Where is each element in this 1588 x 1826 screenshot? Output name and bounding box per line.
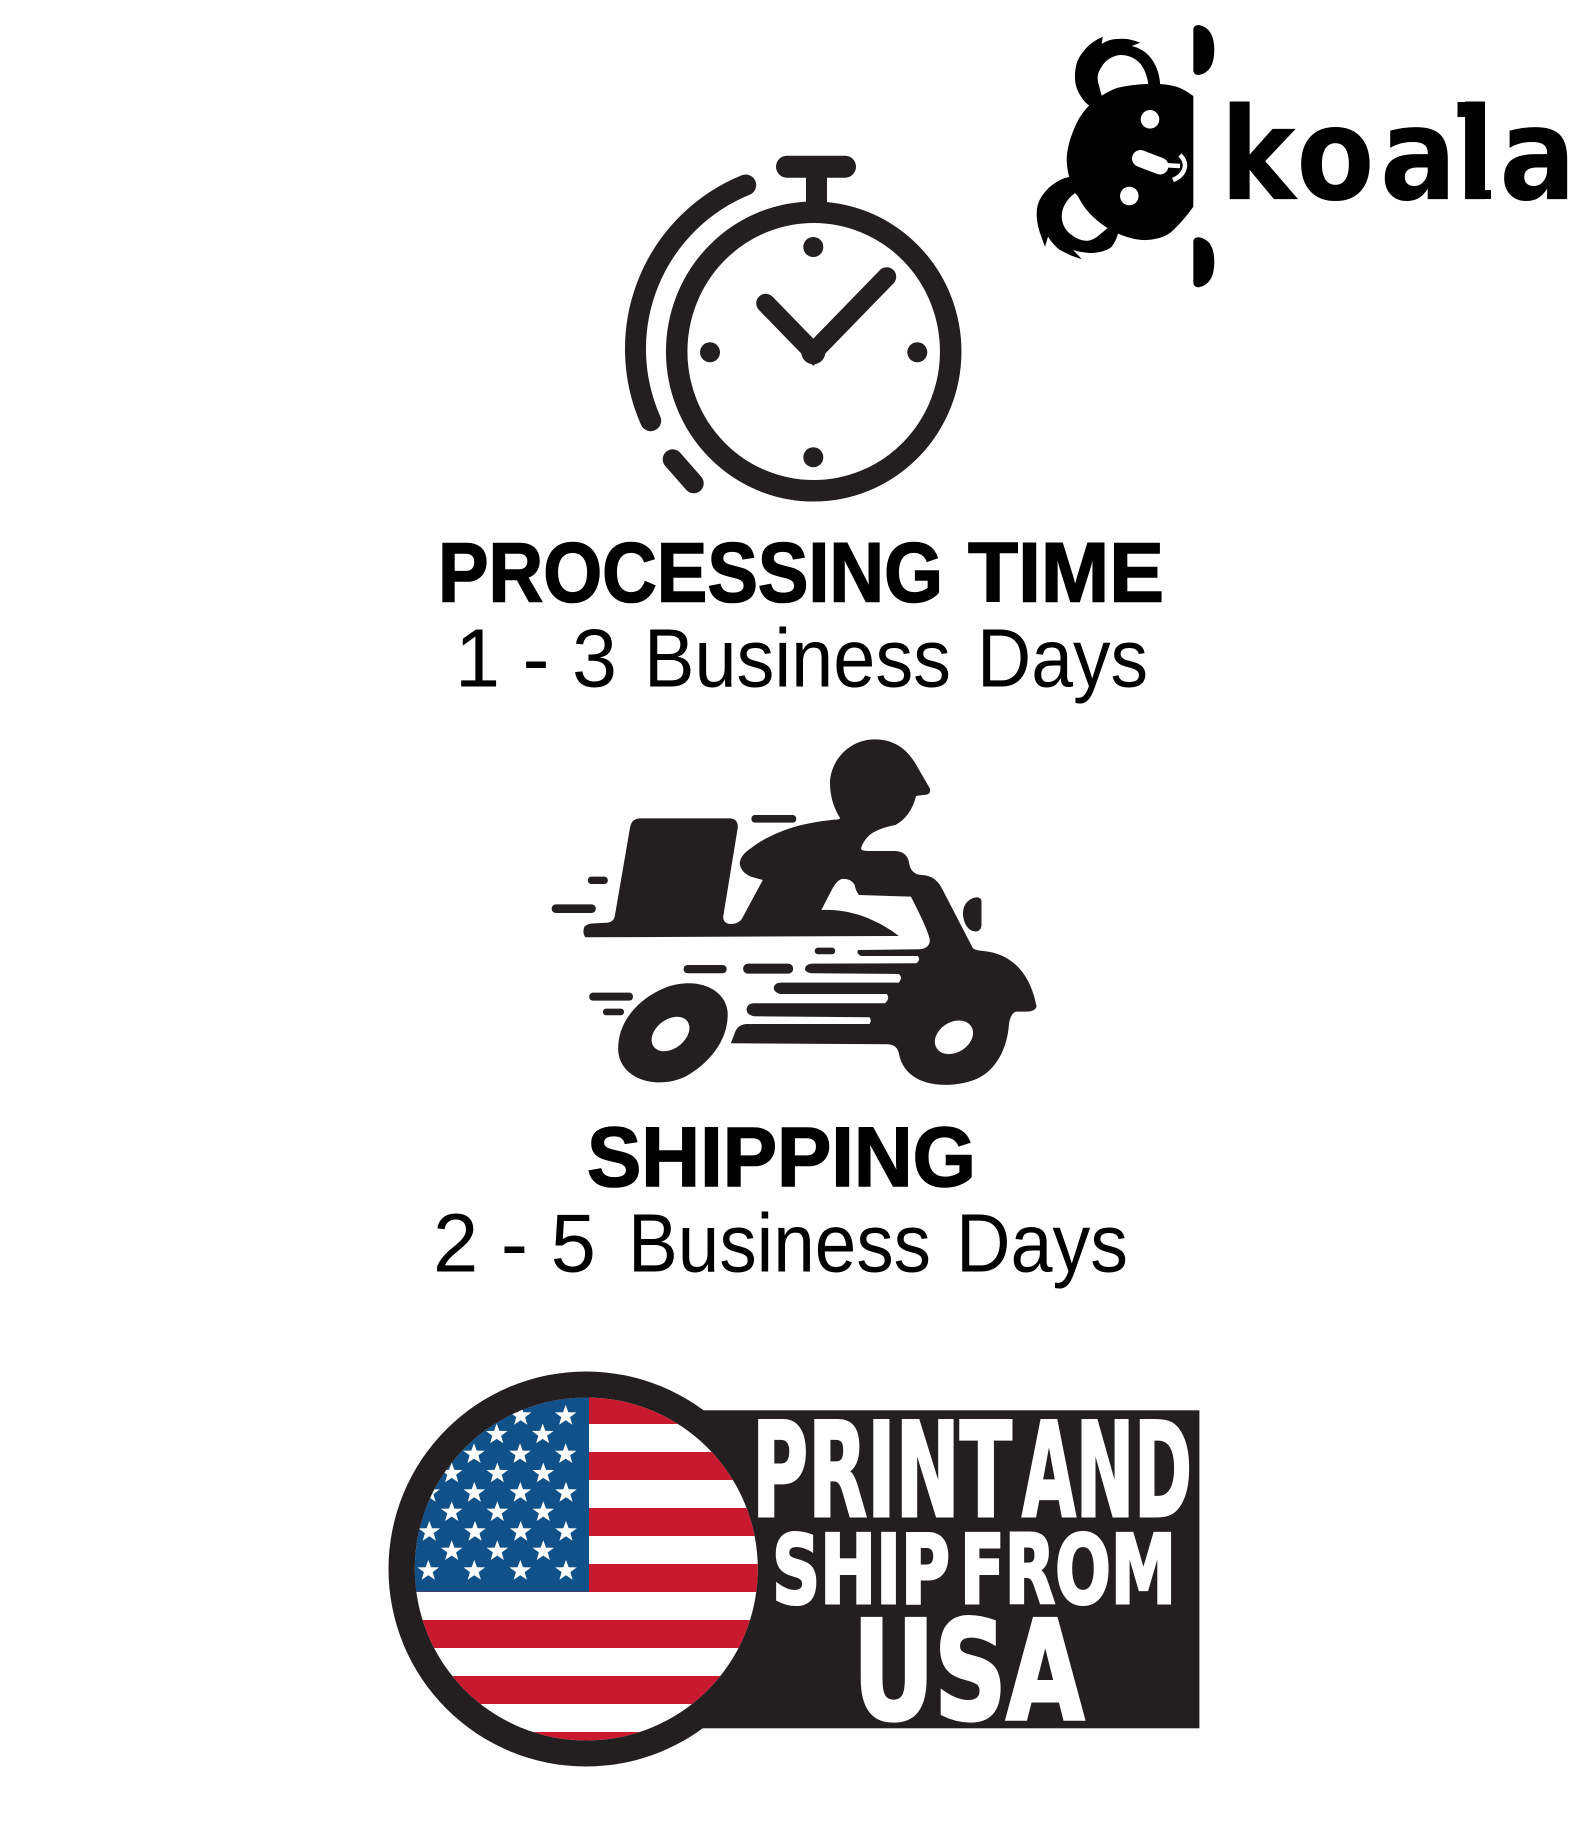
flag ring	[388, 1372, 784, 1766]
logo wordmark: koala	[1220, 81, 1576, 230]
heading: processing time: TIME	[968, 526, 1164, 620]
logo: koala	[1037, 25, 1576, 287]
banner text: AND	[1022, 1394, 1192, 1547]
heading: processing time: PROCESSING	[438, 526, 943, 620]
banner text: FROM	[960, 1516, 1176, 1626]
banner background	[586, 1410, 1199, 1728]
heading: shipping: SHIPPING	[587, 1110, 976, 1204]
text: shipping days: Days	[956, 1197, 1128, 1290]
text: processing days: Business	[644, 612, 951, 705]
text: processing days: 1 - 3	[455, 612, 617, 705]
icon: stopwatch	[635, 167, 951, 491]
text: shipping days	[433, 1197, 1128, 1290]
banner text	[752, 1394, 1192, 1752]
badge: print and ship from USA	[388, 1372, 1199, 1766]
banner text: PRINT	[752, 1394, 1012, 1547]
banner text: USA	[853, 1593, 1084, 1752]
text: shipping days: 2 - 5	[433, 1197, 596, 1290]
icon: delivery scooter	[552, 739, 1037, 1085]
text: processing days: Days	[977, 612, 1148, 705]
text: shipping days: Business	[628, 1197, 931, 1290]
icon: koala head	[1037, 25, 1214, 287]
icon: american flag	[414, 1396, 759, 1760]
text: processing days	[455, 612, 1148, 705]
banner text: SHIP	[772, 1516, 950, 1626]
